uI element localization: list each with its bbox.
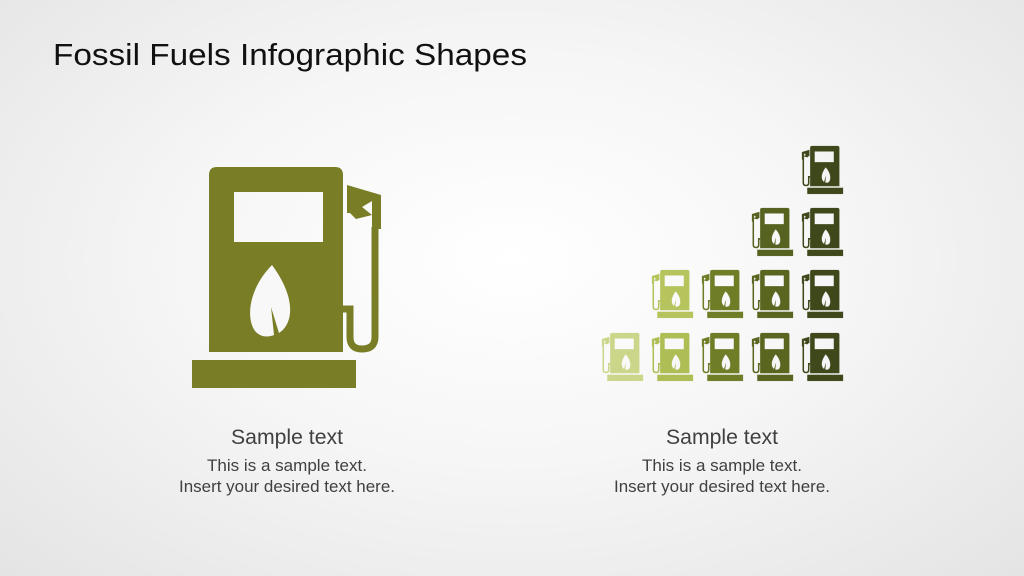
text block: right bbox=[614, 426, 830, 496]
title: Fossil Fuels Infographic Shapes bbox=[53, 37, 527, 72]
text block: left bbox=[179, 426, 395, 496]
text block: right: Sample text bbox=[666, 426, 778, 449]
icon: large fuel pump bbox=[192, 167, 381, 388]
text block: left: Insert your desired text here. bbox=[179, 478, 395, 496]
text block: left: This is a sample text. bbox=[207, 457, 367, 475]
text block: right: Insert your desired text here. bbox=[614, 478, 830, 496]
text block: right: This is a sample text. bbox=[642, 457, 802, 475]
text block: left: Sample text bbox=[231, 426, 343, 449]
icon grid: small fuel pumps bbox=[602, 146, 843, 381]
